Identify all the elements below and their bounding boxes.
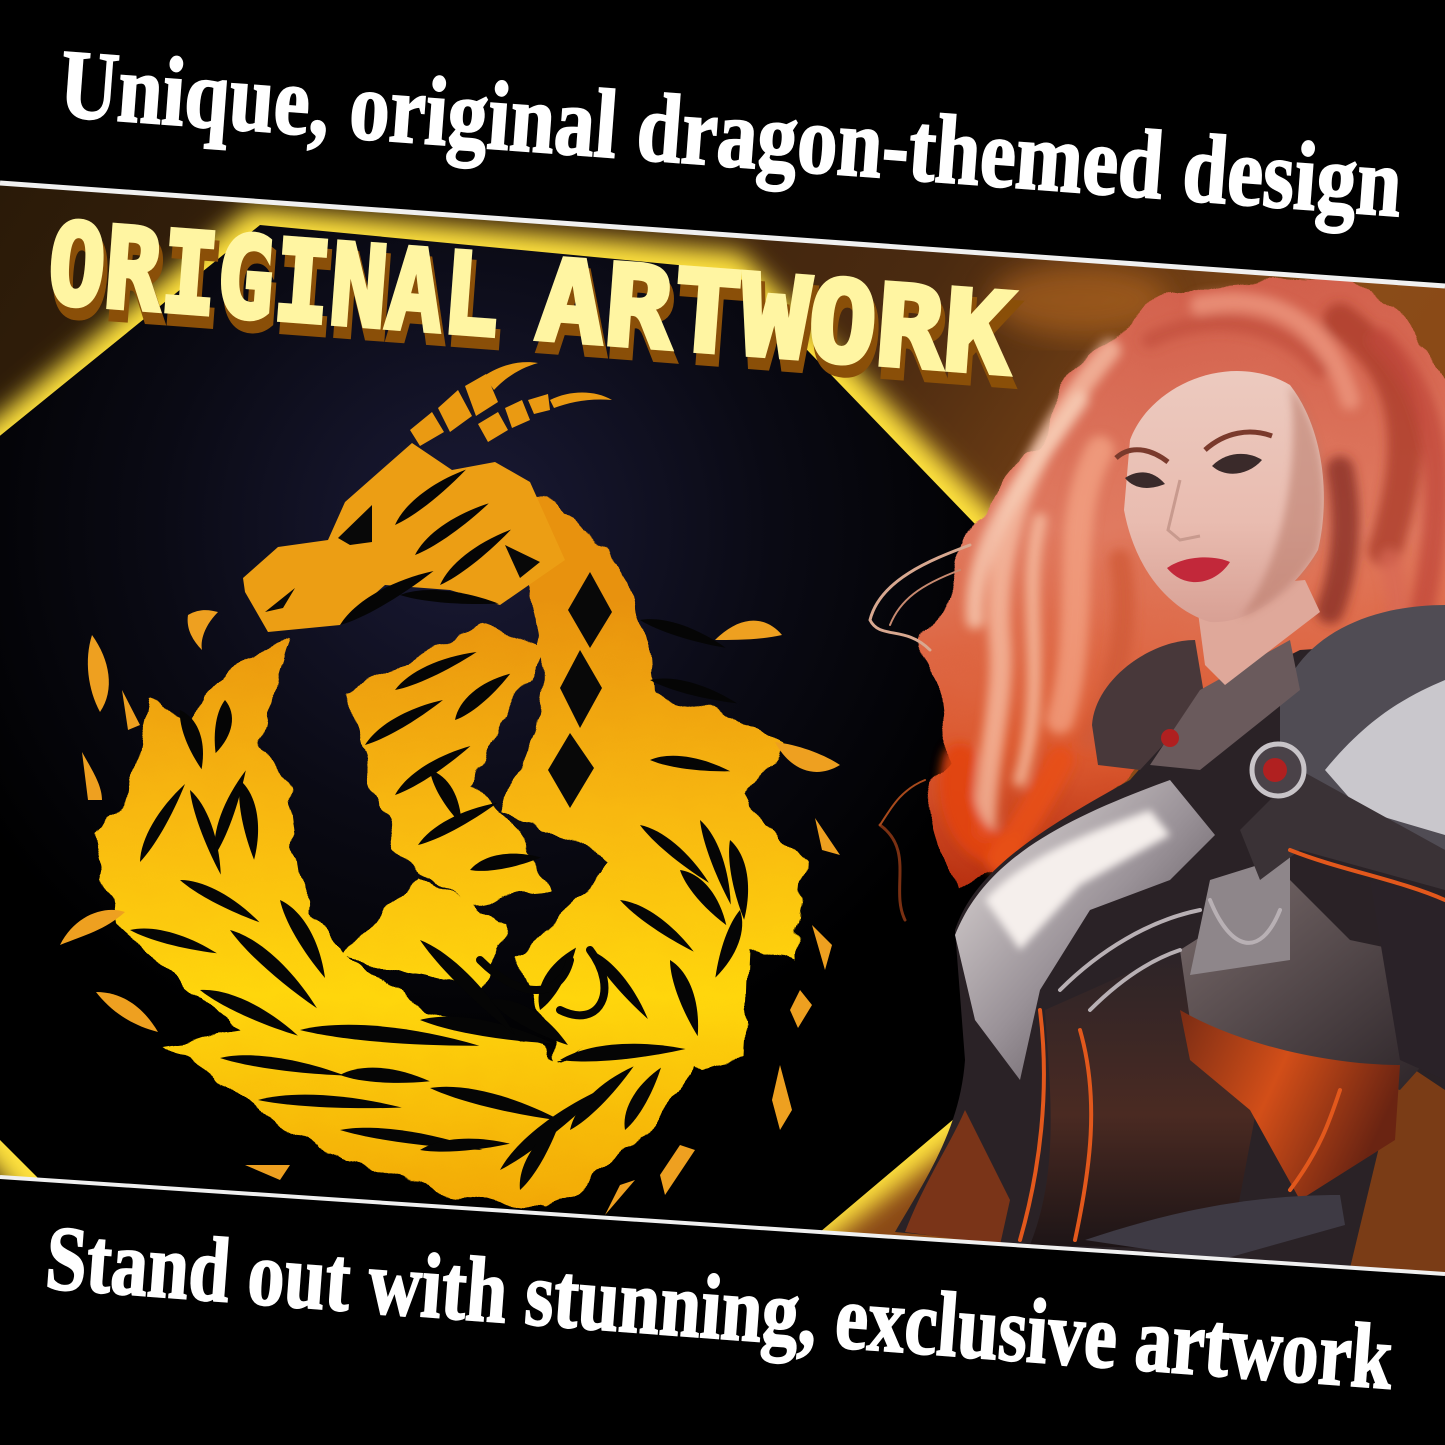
hair strands xyxy=(957,302,1436,860)
waist plate silver xyxy=(1190,855,1290,975)
hair wisps xyxy=(870,545,970,920)
black octagon panel xyxy=(0,225,1000,1232)
badge: ORIGINAL ARTWORK: ORIGINAL xyxy=(47,211,508,374)
collar plate xyxy=(1092,640,1205,770)
neck collar xyxy=(1150,640,1300,770)
pauldron highlight xyxy=(1325,680,1445,835)
badge: ORIGINAL ARTWORK: ARTWORK xyxy=(536,247,1020,412)
lips xyxy=(1167,557,1230,582)
dragon head and neck xyxy=(243,443,565,632)
armor orange trim xyxy=(1020,850,1445,1240)
warrior woman xyxy=(870,279,1445,1272)
armor gems xyxy=(1161,729,1304,796)
left and lower flames xyxy=(95,640,705,1212)
eyes xyxy=(1125,472,1165,488)
background right of hip xyxy=(1350,1060,1445,1272)
dragon body column xyxy=(490,490,657,860)
armor silver filigree xyxy=(1060,900,1280,1010)
band bottom white border xyxy=(0,1177,1445,1274)
torso base xyxy=(895,640,1445,1270)
waist plate xyxy=(1180,880,1418,1090)
badge: ORIGINAL ARTWORK: ARTWORK xyxy=(533,236,1017,401)
right flames xyxy=(515,695,805,1070)
abdomen armor xyxy=(1030,983,1254,1248)
arm plate xyxy=(1370,880,1445,1080)
nose xyxy=(1168,480,1200,540)
brows xyxy=(1116,450,1168,462)
flames body with rough edges xyxy=(95,490,805,1212)
badge: ORIGINAL ARTWORK: ORIGINAL xyxy=(44,199,504,363)
neck xyxy=(1195,580,1320,685)
tilted image band xyxy=(0,180,1445,1280)
silver chest plate xyxy=(955,780,1215,1080)
chest highlight xyxy=(985,810,1170,950)
lower fill xyxy=(536,876,622,1062)
yellow glow octagon xyxy=(0,208,1020,1262)
band background xyxy=(0,180,1445,1280)
flame droplets xyxy=(60,610,840,1215)
dragon black swirl xyxy=(480,950,604,1015)
hair mass xyxy=(923,279,1445,900)
central flames xyxy=(345,625,550,905)
pauldron lower band xyxy=(1240,770,1445,890)
dragon emblem xyxy=(60,362,840,1215)
face features xyxy=(1116,432,1272,582)
right pauldron xyxy=(1280,605,1445,850)
face shadow xyxy=(1240,385,1324,618)
hip orange armor xyxy=(1180,1010,1400,1200)
dragon black flame detail xyxy=(129,463,755,1192)
band top white border xyxy=(0,183,1445,286)
left skirt plate xyxy=(905,1110,1010,1245)
central wedge xyxy=(340,875,510,990)
dragon body scales xyxy=(265,505,612,808)
background orange cloud xyxy=(990,264,1170,336)
face xyxy=(1124,371,1324,622)
badge: ORIGINAL ARTWORK xyxy=(43,199,1021,412)
lower belt xyxy=(1085,1195,1345,1260)
dragon horns xyxy=(410,362,612,446)
